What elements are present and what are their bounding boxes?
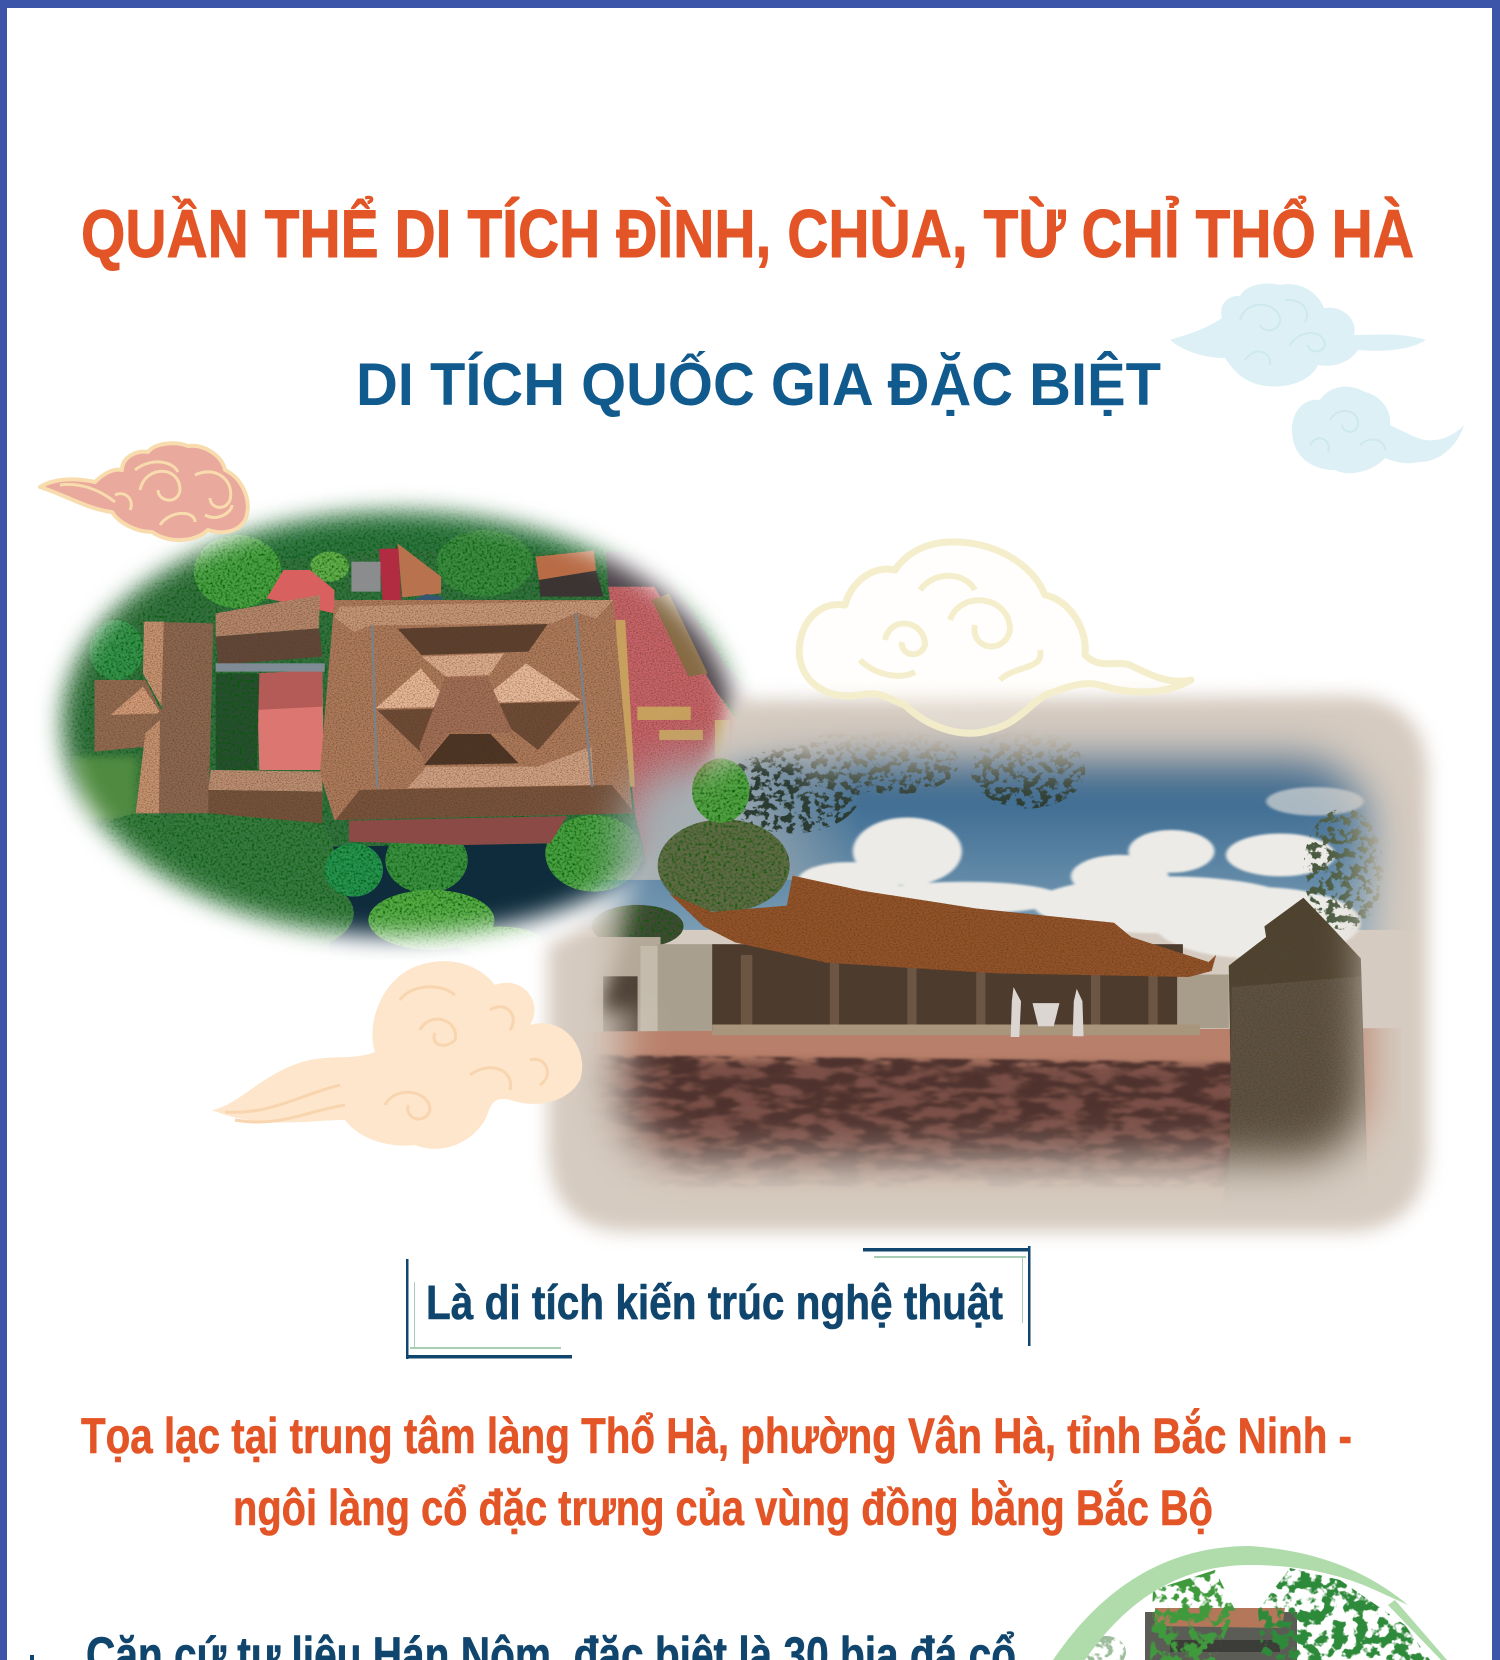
subtitle: DI TÍCH QUỐC GIA ĐẶC BIỆT [356, 351, 1161, 418]
leaves [1150, 1568, 1430, 1660]
main roof [320, 600, 635, 820]
circular photo: temple gate with brush ring [1053, 1546, 1447, 1660]
sky [590, 728, 1400, 930]
ground [594, 1028, 1394, 1188]
courtyard inner [257, 670, 324, 770]
heading text: Là di tích kiến trúc nghệ thuật [426, 1277, 1003, 1330]
bullet mark [30, 1655, 34, 1660]
lower left grass [73, 757, 138, 820]
top hedge [266, 518, 576, 560]
left extension roof [95, 680, 162, 752]
frame thin green lines [410, 1256, 1026, 1349]
cloud: cream outline [799, 542, 1191, 733]
temple walls [594, 937, 1229, 1032]
lower wing roof [208, 770, 322, 823]
cloud: pink [40, 443, 248, 540]
location text [81, 1408, 1352, 1536]
cloud: peach [212, 961, 582, 1149]
white clouds [798, 787, 1364, 958]
cloud: pale blue small [1292, 387, 1464, 473]
cloud: pale blue large [1170, 283, 1426, 386]
right tree [1303, 809, 1384, 930]
lower trees [110, 814, 354, 942]
soft tree shadow on ground [574, 1058, 1240, 1180]
green brush arc [1053, 1546, 1447, 1660]
haze over left sky [595, 732, 850, 880]
temple roof [669, 876, 1216, 977]
bright trees [90, 530, 642, 957]
photo: communal house courtyard [540, 680, 1440, 1240]
upper wing roof [216, 595, 322, 665]
left trees [592, 759, 790, 948]
water [330, 844, 641, 950]
location text: ngôi làng cổ đặc trưng của vùng đồng bằng Bắc Bộ [233, 1480, 1213, 1536]
gate building [1145, 1608, 1297, 1660]
pink courtyard [608, 586, 737, 861]
temple columns [741, 955, 1158, 1026]
aerial base foliage [42, 536, 748, 952]
stone gate post [1224, 898, 1366, 1190]
wall under main roof [349, 816, 567, 845]
left wing roof [136, 622, 213, 813]
incense urn and lanterns [1011, 987, 1084, 1037]
photo: aerial view of the temple [29, 480, 761, 960]
garden [216, 673, 259, 770]
distant tree [1086, 1636, 1126, 1660]
courtyard shadow edge [606, 552, 740, 710]
roof ridge lines [372, 613, 592, 788]
small building top right [536, 551, 603, 597]
frame corners [406, 1246, 1030, 1359]
tree branches [724, 730, 1085, 834]
photo soft beige frame [548, 696, 1428, 1232]
dappled tree shadow [574, 1055, 1240, 1187]
framed heading: architectural art relic [406, 1246, 1030, 1359]
timber stacks [616, 593, 729, 787]
red roof and blue gable [267, 543, 442, 613]
